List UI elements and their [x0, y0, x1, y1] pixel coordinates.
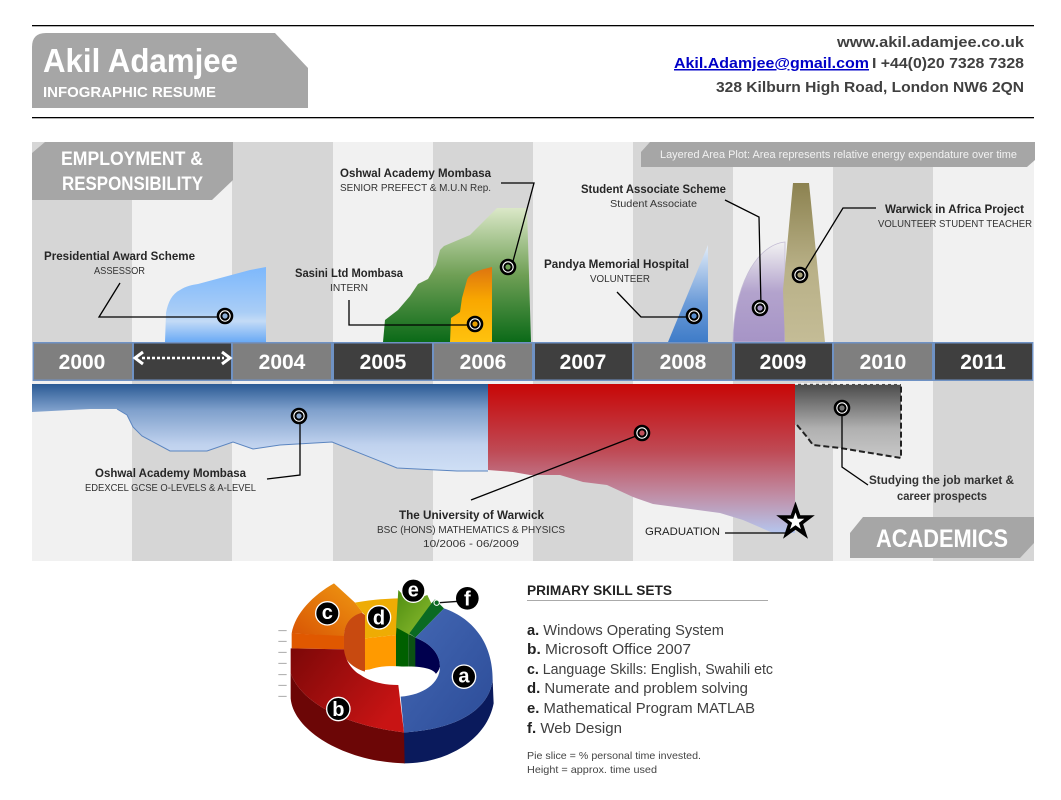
area: Oshwal academics: [32, 384, 488, 471]
callout: University of Warwick: BSC (HONS) MATHEMATICS & PHYSICS: [377, 524, 565, 536]
year labels: 2005: [360, 351, 407, 374]
badges: f: [464, 588, 471, 610]
skills list: c. Language Skills: English, Swahili etc: [527, 662, 773, 678]
academics banner: [850, 517, 1034, 558]
callout: Sasini Ltd: Sasini Ltd Mombasa: [295, 268, 404, 280]
callout: Sasini Ltd: INTERN: [330, 282, 368, 294]
callout: Graduation: GRADUATION: [645, 526, 720, 538]
year labels: 2010: [860, 351, 906, 374]
year labels: 2008: [660, 351, 707, 374]
title banner: [32, 33, 308, 108]
website: www.akil.adamjee.co.uk: [836, 34, 1025, 51]
callout: Presidential Award Scheme: [44, 251, 232, 323]
slice c: [292, 583, 363, 649]
callout: University of Warwick: The University of Warwick: [399, 510, 545, 522]
slice b: [291, 648, 405, 763]
chart note: Height = approx. time used: [527, 764, 657, 776]
callout: Pandya Memorial Hospital: VOLUNTEER: [590, 273, 650, 285]
area: Presidential Award: [165, 267, 266, 342]
slice e: [396, 590, 431, 635]
connector f: [439, 601, 467, 603]
timeline background columns: [32, 142, 1034, 561]
skills list: [527, 623, 773, 737]
employment banner: RESPONSIBILITY: [62, 174, 203, 195]
badges: a: [458, 665, 470, 687]
skills list: b. Microsoft Office 2007: [527, 642, 691, 658]
arrow: 2001 to 2003 range: [135, 352, 230, 364]
callout: Pandya Memorial Hospital: Pandya Memorial Hospital: [544, 259, 689, 271]
area: Warwick in Africa: [783, 183, 825, 342]
subtitle: INFOGRAPHIC RESUME: [43, 84, 216, 101]
name heading: Akil Adamjee: [43, 42, 238, 79]
slice walls: [344, 613, 440, 680]
badges: d: [373, 607, 385, 629]
skills list: e. Mathematical Program MATLAB: [527, 701, 755, 717]
badges: b: [332, 699, 344, 721]
marker dot f: [434, 600, 439, 605]
callout: Warwick in Africa Project: VOLUNTEER STUDENT TEACHER: [878, 218, 1032, 230]
year labels: [59, 351, 1006, 374]
skills heading: PRIMARY SKILL SETS: [527, 583, 672, 598]
year labels: 2007: [560, 351, 606, 374]
callout: Oshwal A-level: EDEXCEL GCSE O-LEVELS & A-LEVEL: [85, 482, 256, 494]
callout: Presidential Award Scheme: Presidential Award Scheme: [44, 251, 195, 263]
callout: Graduation: [645, 507, 810, 538]
callout: job market: Studying the job market &: [869, 475, 1014, 487]
callout: Oshwal senior prefect: Oshwal Academy Mombasa: [340, 168, 492, 180]
callout: Warwick in Africa Project: [793, 204, 1032, 282]
area: Sasini intern: [450, 267, 492, 342]
callout: Presidential Award Scheme: ASSESSOR: [94, 265, 145, 277]
contact details: [674, 34, 1025, 96]
slice f: [409, 599, 444, 638]
year labels: 2004: [259, 351, 306, 374]
badges: c: [322, 602, 333, 624]
header rule bottom: [32, 117, 1034, 118]
phone: I +44(0)20 7328 7328: [872, 55, 1024, 72]
callout: Student Associate Scheme: Student Associate Scheme: [581, 184, 726, 196]
header rule top: [32, 25, 1034, 26]
callout: Student Associate Scheme: Student Associate: [610, 198, 697, 210]
area: Student Associate: [733, 242, 785, 342]
address: 328 Kilburn High Road, London NW6 2QN: [716, 79, 1024, 96]
slice d: [355, 598, 398, 638]
badges: e: [408, 579, 419, 601]
callout: Warwick in Africa Project: Warwick in Africa Project: [885, 204, 1024, 216]
callout: University of Warwick: [377, 426, 649, 550]
year labels: 2011: [960, 351, 1006, 374]
chart note: [527, 750, 701, 776]
year labels: 2009: [760, 351, 806, 374]
icon: star: [782, 507, 810, 534]
employment banner: [32, 142, 233, 200]
chart: skills 3D donut: [278, 579, 494, 763]
callout: Oshwal senior prefect: SENIOR PREFECT & M.U.N Rep.: [340, 182, 491, 194]
year labels: 2006: [460, 351, 506, 374]
callout: University of Warwick: 10/2006 - 06/2009: [423, 538, 519, 550]
hole: [361, 666, 437, 697]
callout: Sasini Ltd: [295, 268, 482, 331]
callout: Oshwal A-level: [85, 409, 306, 494]
area: job market study: [795, 384, 901, 458]
area: University of Warwick: [488, 384, 795, 533]
ticks: [278, 631, 287, 696]
callout: Oshwal senior prefect: [340, 168, 534, 274]
skills list: a. Windows Operating System: [527, 623, 724, 639]
employment banner: EMPLOYMENT &: [61, 149, 203, 170]
area: Oshwal senior prefect: [383, 208, 531, 342]
area: Pandya hospital: [668, 245, 708, 342]
callout: Oshwal A-level: Oshwal Academy Mombasa: [95, 468, 247, 480]
callout: Student Associate Scheme: [581, 184, 767, 315]
chart note: Pie slice = % personal time invested.: [527, 750, 701, 762]
badges: [316, 579, 479, 721]
callout: Pandya Memorial Hospital: [544, 259, 701, 323]
callout: job market: career prospects: [897, 491, 987, 503]
skills list: f. Web Design: [527, 721, 622, 737]
legend note banner: Layered Area Plot: Area represents relative energy expendature over time: [660, 149, 1017, 161]
year labels: 2000: [59, 351, 105, 374]
year bar: [32, 342, 1034, 381]
email link: Akil.Adamjee@gmail.com: [674, 55, 869, 72]
callout: job market: [835, 401, 1014, 503]
skills list: d. Numerate and problem solving: [527, 681, 748, 697]
slice a: [401, 608, 494, 763]
legend note banner: [641, 142, 1035, 167]
academics banner: ACADEMICS: [876, 525, 1008, 553]
